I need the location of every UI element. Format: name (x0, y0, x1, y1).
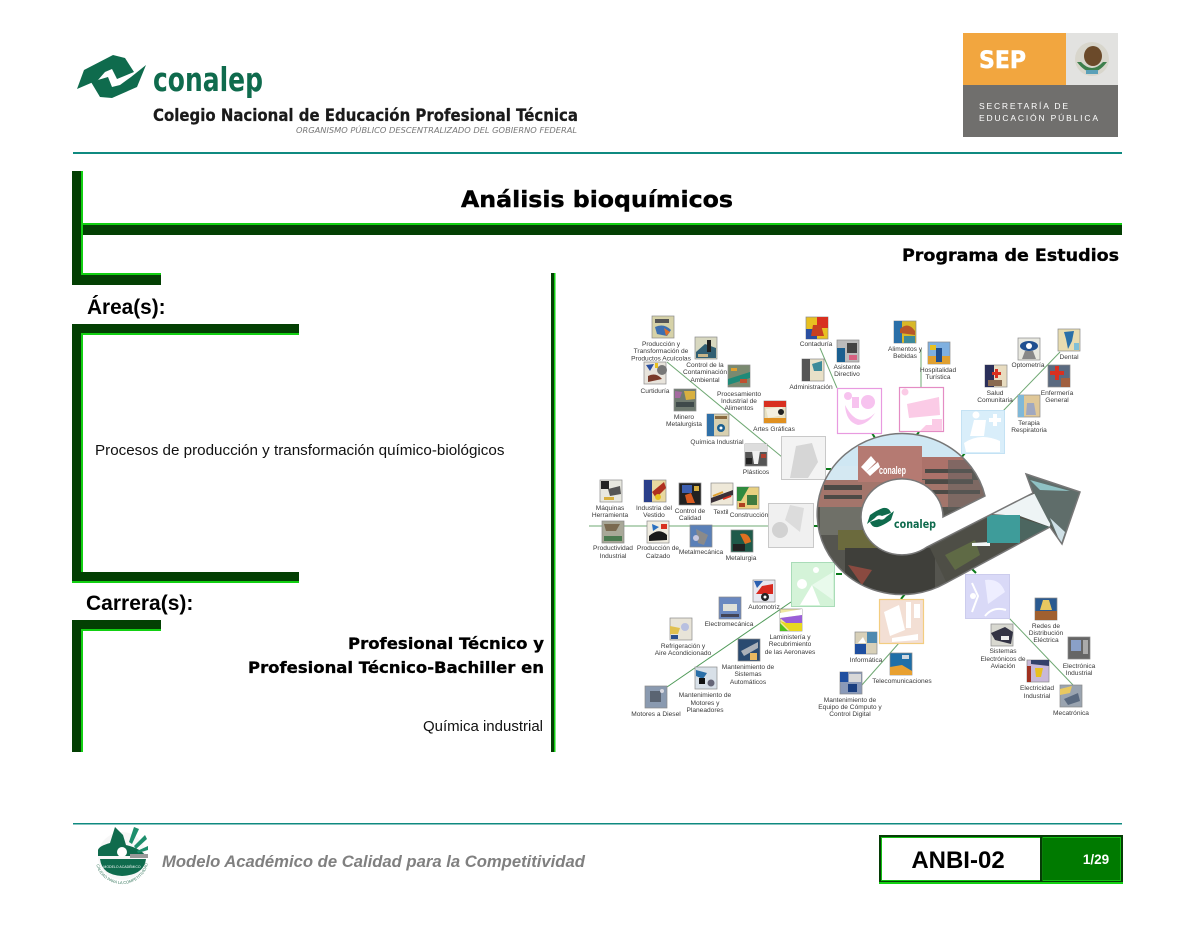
label: Ambiental (690, 377, 720, 384)
Control de Calidad (675, 483, 706, 522)
label: Administración (789, 384, 833, 391)
label: Artes Gráficas (753, 426, 796, 433)
label: Equipo de Cómputo y (818, 704, 882, 711)
label: Motores a Diesel (631, 711, 681, 718)
Curtiduría (641, 362, 670, 395)
area square: plastics gray (782, 436, 826, 480)
icon (679, 483, 701, 505)
icon (695, 667, 717, 689)
Administración (789, 359, 833, 391)
diagram: conalep areas (589, 316, 1096, 718)
icon (928, 342, 950, 364)
heading: careers: Carrera(s): (86, 592, 193, 615)
label: Mantenimiento de (824, 697, 877, 704)
sky (835, 434, 961, 466)
Refrigeración y Aire Acondicionado (655, 618, 712, 657)
center logo: conalep (894, 517, 936, 531)
icon (644, 480, 666, 502)
Productividad Industrial (593, 521, 633, 560)
icon (1018, 395, 1040, 417)
label: Industrial (1066, 670, 1093, 677)
icon (1018, 338, 1040, 360)
label: Control Digital (829, 711, 871, 718)
arrow: building and sky (990, 493, 1052, 527)
Telecomunicaciones (872, 653, 932, 685)
connector lines (589, 348, 1073, 687)
label: Máquinas (596, 505, 625, 512)
label: Asistente (833, 364, 861, 371)
SEP wordmark: SEP (979, 46, 1026, 74)
label: Productividad (593, 545, 633, 552)
label: Redes de (1032, 623, 1060, 630)
icon (737, 487, 759, 509)
SEP full name: EDUCACIÓN PÚBLICA (979, 113, 1098, 123)
Salud Comunitaria (977, 365, 1013, 404)
Química Industrial (690, 414, 744, 446)
icon (764, 401, 786, 423)
subtitle: program: Programa de Estudios (902, 246, 1119, 266)
label: Hospitalidad (920, 367, 956, 374)
label: de las Aeronaves (765, 649, 816, 656)
label: Comunitaria (977, 397, 1013, 404)
label: Optometría (1012, 362, 1045, 369)
icon (745, 444, 767, 466)
label: Terapia (1018, 420, 1040, 427)
label: Sistemas (734, 671, 762, 678)
icon (647, 521, 669, 543)
logo: SEP (963, 33, 1118, 137)
label: Salud (987, 390, 1004, 397)
label: Transformación de (634, 348, 689, 355)
ring and arrow graphic (810, 430, 1090, 600)
Electricidad Industrial (1020, 660, 1054, 700)
Alimentos y Bebidas (888, 321, 923, 360)
label: Respiratoria (1011, 427, 1047, 434)
label: Recubrimiento (769, 641, 812, 648)
Construcción (730, 487, 769, 519)
label: Metalurgista (666, 421, 702, 428)
label: Control de la (686, 362, 724, 369)
logo: conalep header (77, 55, 578, 135)
Metalurgia (726, 530, 757, 562)
Industria del Vestido (636, 480, 672, 519)
seal text: MODELO ACADÉMICO (103, 864, 141, 869)
icon (707, 414, 729, 436)
area square: business pink (838, 388, 882, 434)
label: Productos Acuícolas (631, 356, 692, 362)
area text: Procesos de producción y transformación químico-biológicos (95, 442, 505, 459)
label: Planeadores (686, 707, 724, 714)
Producción y Transformación (631, 316, 692, 362)
label: Calidad (679, 515, 702, 522)
area square: electronics lilac (966, 574, 1010, 618)
arrow: head (1026, 474, 1080, 544)
label: Plásticos (743, 469, 770, 476)
Máquinas Herramienta (592, 480, 628, 519)
label: Minero (674, 414, 694, 421)
footer text: Modelo Académico de Calidad para la Competitividad (162, 852, 586, 871)
label: Control de (675, 508, 706, 515)
area square: tourism pink (900, 388, 944, 432)
icon (728, 365, 750, 387)
label: Industrial (600, 553, 627, 560)
icon (600, 480, 622, 502)
icon (690, 525, 712, 547)
label: Eléctrica (1033, 637, 1059, 644)
label: Aire Acondicionado (655, 650, 712, 657)
Terapia Respiratoria (1011, 395, 1047, 434)
label: Sistemas (989, 648, 1017, 655)
Textil (711, 483, 733, 516)
icon (985, 365, 1007, 387)
label: Textil (713, 509, 729, 516)
label: Construcción (730, 512, 769, 519)
label: Enfermería (1041, 390, 1074, 397)
label: Electrónica (1063, 663, 1096, 670)
area square: mechanics green (792, 562, 834, 606)
icon (644, 362, 667, 384)
label: Contaduría (800, 341, 833, 348)
career type (248, 634, 545, 677)
icon (652, 316, 674, 338)
label: Contaminación (683, 369, 727, 376)
Optometría (1012, 338, 1045, 369)
center logo (867, 508, 936, 531)
label: Industria del (636, 505, 672, 512)
title: Análisis bioquímicos (461, 188, 733, 213)
label: Electromecánica (705, 621, 754, 628)
label: General (1045, 397, 1069, 404)
label: Aviación (991, 663, 1016, 670)
institution name: Colegio Nacional de Educación Profesional Técnica (153, 106, 578, 125)
ring building logo: conalep (879, 465, 906, 477)
label: Curtiduría (641, 388, 670, 395)
Metalmecánica (679, 525, 724, 556)
label: Alimentos (725, 405, 754, 412)
label: Electricidad (1020, 685, 1054, 692)
label: Turística (925, 374, 951, 381)
Redes de Distribución Eléctrica (1029, 598, 1064, 644)
wordmark: conalep: conalep (153, 60, 263, 99)
Laministería y Recubrimiento (765, 609, 816, 656)
icon (840, 672, 862, 694)
icon (719, 597, 741, 619)
label: Vestido (643, 512, 665, 519)
label: Directivo (834, 371, 860, 378)
label: Metalmecánica (679, 549, 724, 556)
icon (1060, 685, 1082, 707)
icon (695, 337, 717, 359)
label: Informática (850, 657, 883, 664)
label: Dental (1059, 354, 1079, 361)
icon: national seal (1075, 42, 1109, 76)
area square: health blue (962, 410, 1004, 454)
icon (1068, 637, 1090, 659)
Plásticos (743, 444, 770, 476)
icon (890, 653, 912, 675)
icon (753, 580, 775, 602)
icon (711, 483, 733, 505)
label: Procesamiento (717, 391, 761, 398)
ring building logo (861, 456, 906, 477)
label: Producción y (642, 341, 681, 348)
frame: area bracket (72, 324, 299, 583)
building (818, 480, 988, 507)
Electrónica Industrial (1063, 637, 1096, 677)
label: Producción de (637, 545, 679, 552)
icon (1058, 329, 1080, 351)
icon (1035, 598, 1057, 620)
career type: Profesional Técnico-Bachiller en (248, 658, 544, 677)
label: Mantenimiento de (722, 664, 775, 671)
label: Bebidas (893, 353, 918, 360)
vertical divider (551, 273, 556, 752)
Mantenimiento de Motores y Planeadores (679, 667, 732, 714)
icon (670, 618, 692, 640)
icon (802, 359, 824, 381)
career name: Química industrial (423, 718, 543, 735)
label: Telecomunicaciones (872, 678, 932, 685)
icon (780, 609, 802, 631)
icon (855, 632, 877, 654)
icon (894, 321, 916, 343)
career type: Profesional Técnico y (348, 634, 545, 653)
frame: careers bracket (72, 620, 161, 752)
Procesamiento Industrial de Alimentos (717, 365, 761, 412)
icon: conalep swoosh (77, 55, 146, 98)
Electromecánica (705, 597, 754, 628)
footer code box (879, 835, 1123, 884)
seal ring text: CALIDAD PARA LA COMPETITIVIDAD (96, 863, 148, 884)
label: Metalurgia (726, 555, 757, 562)
Contaduría (800, 317, 833, 348)
label: Automáticos (730, 679, 767, 686)
icon (991, 624, 1013, 646)
Artes Gráficas (753, 401, 796, 433)
label: Industrial de (721, 398, 757, 405)
Minero Metalurgista (666, 389, 702, 428)
label: Motores y (691, 700, 720, 707)
label: Química Industrial (690, 439, 744, 446)
label: Herramienta (592, 512, 628, 519)
Mantenimiento de Equipo de Cómputo (818, 672, 882, 718)
Motores a Diesel (631, 686, 681, 718)
label: Electrónicos de (980, 656, 1026, 663)
frame: title bracket (72, 171, 1122, 285)
icon (1048, 365, 1070, 387)
label: Automotriz (748, 604, 780, 611)
SEP full name: SECRETARÍA DE (979, 101, 1068, 111)
icon (674, 389, 696, 411)
icon (837, 340, 859, 362)
icon (1027, 660, 1049, 682)
area square: informatics orange (880, 600, 924, 644)
Asistente Directivo (833, 340, 861, 378)
icon (602, 521, 624, 543)
icon (645, 686, 667, 708)
area square: industrial gray (768, 504, 814, 548)
label: Calzado (646, 553, 670, 560)
Automotriz (748, 580, 780, 611)
Mecatrónica (1053, 685, 1089, 717)
icon (731, 530, 753, 552)
Sistemas Electrónicos de Aviación (980, 624, 1026, 670)
label: Laministería y (769, 634, 811, 641)
label: Refrigeración y (661, 643, 706, 650)
footer logo (96, 827, 148, 884)
code: ANBI-02 (911, 847, 1005, 874)
icon (738, 639, 760, 661)
Control de la Contaminación (683, 337, 727, 384)
Dental (1058, 329, 1080, 361)
institution subtitle: ORGANISMO PÚBLICO DESCENTRALIZADO DEL GOBIERNO FEDERAL (296, 126, 577, 135)
page number: 1/29 (1083, 852, 1109, 867)
label: Industrial (1024, 693, 1051, 700)
Producción de Calzado (637, 521, 679, 560)
heading: area: Área(s): (87, 296, 166, 319)
label: Distribución (1029, 630, 1064, 637)
Informática (850, 632, 883, 664)
Mantenimiento de Sistemas Automáticos (722, 639, 775, 686)
Enfermería General (1041, 365, 1074, 404)
icon (806, 317, 828, 339)
label: Mantenimiento de (679, 692, 732, 699)
label: Alimentos y (888, 346, 923, 353)
Hospitalidad Turística (920, 342, 956, 381)
garden (820, 507, 862, 535)
label: Mecatrónica (1053, 710, 1089, 717)
